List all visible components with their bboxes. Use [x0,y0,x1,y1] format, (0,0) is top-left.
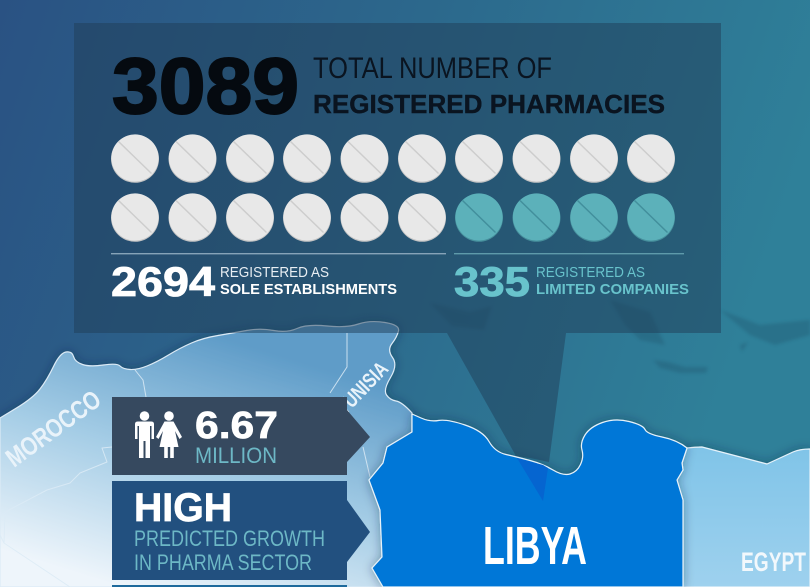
box: predicted growth: PREDICTED GROWTH [134,526,325,551]
box: population: 6.67 [195,405,278,447]
map: Egypt [677,447,810,587]
heading: total number: TOTAL NUMBER OF [313,52,552,85]
stat: sole establishments [111,258,397,305]
box: next section, cropped [112,585,347,587]
stat: limited companies: LIMITED COMPANIES [536,281,689,298]
stat: sole establishments: REGISTERED AS [220,264,329,281]
panel: registered pharmacies [74,23,721,333]
label: Libya: LIBYA [483,516,587,576]
heading: total number: 3089 [112,41,299,130]
box: predicted growth [112,481,370,580]
map: country borders [0,333,370,587]
box: predicted growth: IN PHARMA SECTOR [134,550,312,575]
box: predicted growth: HIGH [134,486,232,530]
heading: total number [112,41,665,130]
box: population [112,397,370,475]
label: Morocco: MOROCCO [0,384,107,473]
map: land (Morocco, Algeria, Tunisia) [0,322,412,587]
map: Libya highlighted [369,414,687,587]
callout pointer [447,333,566,501]
label: Tunisia: TUNISIA [332,357,393,419]
icon: man and woman [135,411,182,458]
stat: limited companies: REGISTERED AS [536,264,645,281]
stat: limited companies [454,258,689,305]
pill chart [111,134,675,242]
stat: sole establishments: SOLE ESTABLISHMENTS [220,281,397,298]
stat: limited companies: 335 [454,258,530,305]
box: population: MILLION [195,443,277,468]
sea islands and far coastlines [430,300,810,373]
heading: total number: REGISTERED PHARMACIES [313,89,665,119]
stat: sole establishments: 2694 [111,258,216,305]
